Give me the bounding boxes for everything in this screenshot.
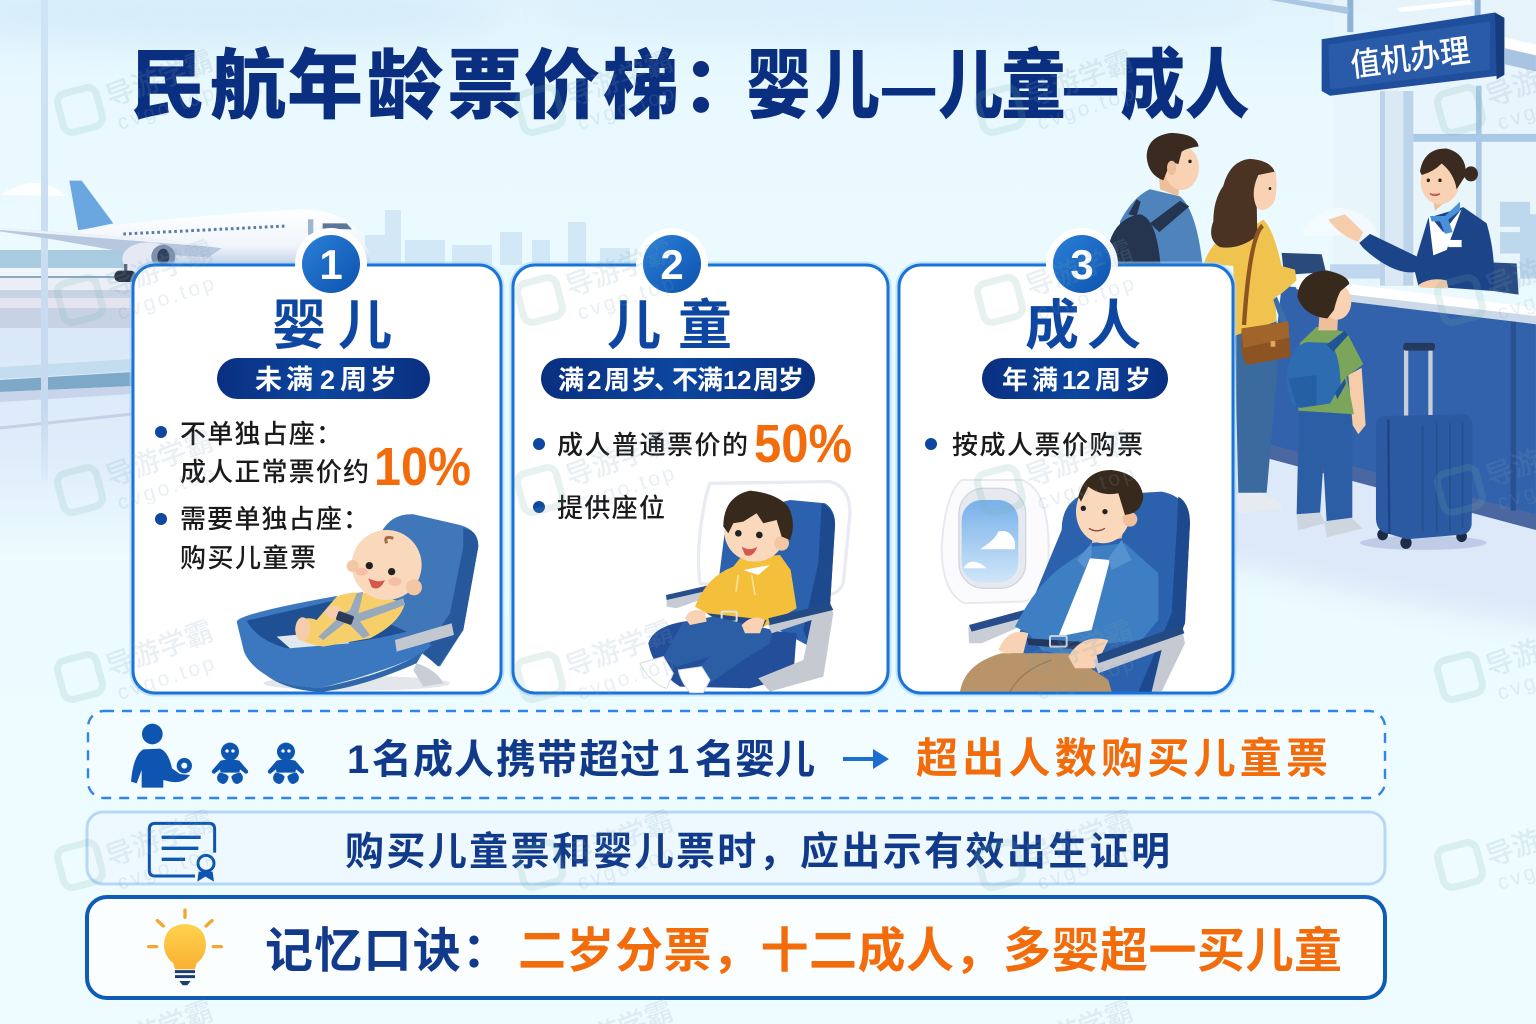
rule row: birth certificate (87, 812, 1385, 884)
bullets: infant: 不单独占座： (180, 419, 342, 449)
bullets: child (533, 414, 852, 523)
staff member (1328, 149, 1519, 295)
watermarks: cvgo.top (574, 651, 680, 705)
watermarks: cvgo.top (574, 81, 680, 135)
scene: check-in counter and passengers (1109, 0, 1536, 628)
title: 民航年龄票价梯： (130, 44, 758, 129)
age pill: child (541, 358, 815, 399)
arrow (843, 749, 889, 769)
watermarks: 导游学霸 (1021, 425, 1137, 493)
watermarks: 导游学霸 (561, 425, 677, 493)
panel: infant card (133, 228, 501, 693)
bullet: adult: 按成人票价购票 (952, 430, 1143, 460)
number badge 2 (636, 228, 708, 300)
panel: child card (513, 228, 888, 693)
bullets: infant: 需要单独占座： (180, 504, 369, 534)
skyline (365, 210, 630, 265)
age pill: adult (982, 358, 1168, 399)
sign (1322, 12, 1504, 96)
rule row: one adult with more than one infant (88, 711, 1385, 798)
bullets: infant: 成人正常票价约 (180, 457, 369, 487)
watermarks: 导游学霸 (101, 425, 217, 493)
counter (1263, 253, 1536, 530)
watermarks: 导游学霸 (1021, 235, 1137, 303)
watermarks: cvgo.top (1034, 841, 1140, 895)
watermarks: cvgo.top (1034, 461, 1140, 515)
watermarks: 导游学霸 (101, 45, 217, 113)
text: one adult with over one infant: 1名成人携带超过1名婴儿 (347, 738, 815, 782)
icon: light bulb (149, 910, 221, 985)
heading: child (607, 296, 732, 356)
title: —— (882, 44, 1118, 128)
watermarks: 导游学霸 (561, 805, 677, 873)
text: birth certificate requirement: 购买儿童票和婴儿票时，应出示有效出生证明 (345, 831, 1170, 874)
watermarks: cvgo.top (114, 841, 220, 895)
bullets: infant: 购买儿童票 (180, 543, 316, 573)
watermarks: cvgo.top (114, 461, 220, 515)
age pill: adult: 年满12周岁 (1002, 365, 1151, 395)
apron ground (0, 268, 133, 560)
panel: adult card (899, 228, 1233, 693)
heading: infant: 婴 (272, 296, 326, 356)
number badge 3 (1046, 228, 1118, 300)
number badge 1: 1 (319, 241, 343, 288)
watermarks: 导游学霸 (1021, 615, 1137, 683)
man with backpack (1109, 133, 1203, 266)
heading: child: 童 (678, 296, 732, 356)
number badge 1 (295, 228, 367, 300)
heading: child: 儿 (607, 296, 661, 356)
floor (1200, 429, 1536, 628)
heading: adult (1025, 296, 1141, 356)
bullets: child: 成人普通票价的 (557, 430, 748, 460)
watermarks: 导游学霸 (101, 805, 217, 873)
heading: adult: 人 (1087, 296, 1141, 356)
watermarks: cvgo.top (1034, 271, 1140, 325)
watermarks: cvgo.top (574, 461, 680, 515)
watermarks: 导游学霸 (101, 235, 217, 303)
age pill: child: 满2周岁、不满12周岁 (558, 365, 804, 395)
number badge 2: 2 (660, 241, 684, 288)
icon: adult holding baby and two infants (131, 724, 304, 788)
watermarks: cvgo.top (574, 841, 680, 895)
icon: certificate (149, 823, 215, 882)
terminal windows (1270, 0, 1536, 286)
age pill: infant (217, 358, 430, 399)
watermarks: cvgo.top (114, 651, 220, 705)
watermarks: 导游学霸 (561, 45, 677, 113)
sign: 值机办理 (1349, 32, 1472, 84)
watermarks: 导游学霸 (561, 235, 677, 303)
illustration: adult in window seat (942, 470, 1190, 692)
watermarks: cvgo.top (1034, 651, 1140, 705)
illustration: baby in bassinet (237, 514, 478, 692)
watermarks: 导游学霸 (1021, 805, 1137, 873)
illustration: child in seat (640, 482, 850, 693)
suitcase (1376, 343, 1473, 549)
illustration: airplane on apron (0, 181, 370, 282)
bullets: child: 50% (754, 414, 852, 474)
text: extra persons buy child ticket: 超出人数购买儿童票 (916, 735, 1328, 782)
heading: adult: 成 (1025, 296, 1079, 356)
rule row: memory mnemonic (87, 897, 1385, 998)
boy with backpack (1287, 270, 1366, 537)
watermarks: cvgo.top (114, 271, 220, 325)
woman with shoulder bag (1204, 159, 1297, 514)
title (130, 43, 1250, 129)
watermarks: 导游学霸 (561, 615, 677, 683)
heading: infant (272, 296, 392, 356)
number badge 3: 3 (1070, 241, 1094, 288)
heading: infant: 儿 (338, 296, 392, 356)
watermarks: cvgo.top (1034, 81, 1140, 135)
age pill: infant: 未满2周岁 (255, 365, 397, 395)
watermarks: cvgo.top (574, 271, 680, 325)
watermarks: 导游学霸 (1021, 45, 1137, 113)
bullets: infant (155, 419, 471, 573)
bullets: child: 提供座位 (557, 493, 665, 523)
watermarks: cvgo.top (114, 81, 220, 135)
bullets: infant: 10% (374, 437, 471, 497)
text: mnemonic: 二岁分票，十二成人，多婴超一买儿童 (518, 925, 1342, 978)
text: mnemonic label: 记忆口诀： (265, 925, 510, 978)
watermarks: 导游学霸 (101, 615, 217, 683)
title: 婴儿儿童成人 (746, 43, 1250, 128)
